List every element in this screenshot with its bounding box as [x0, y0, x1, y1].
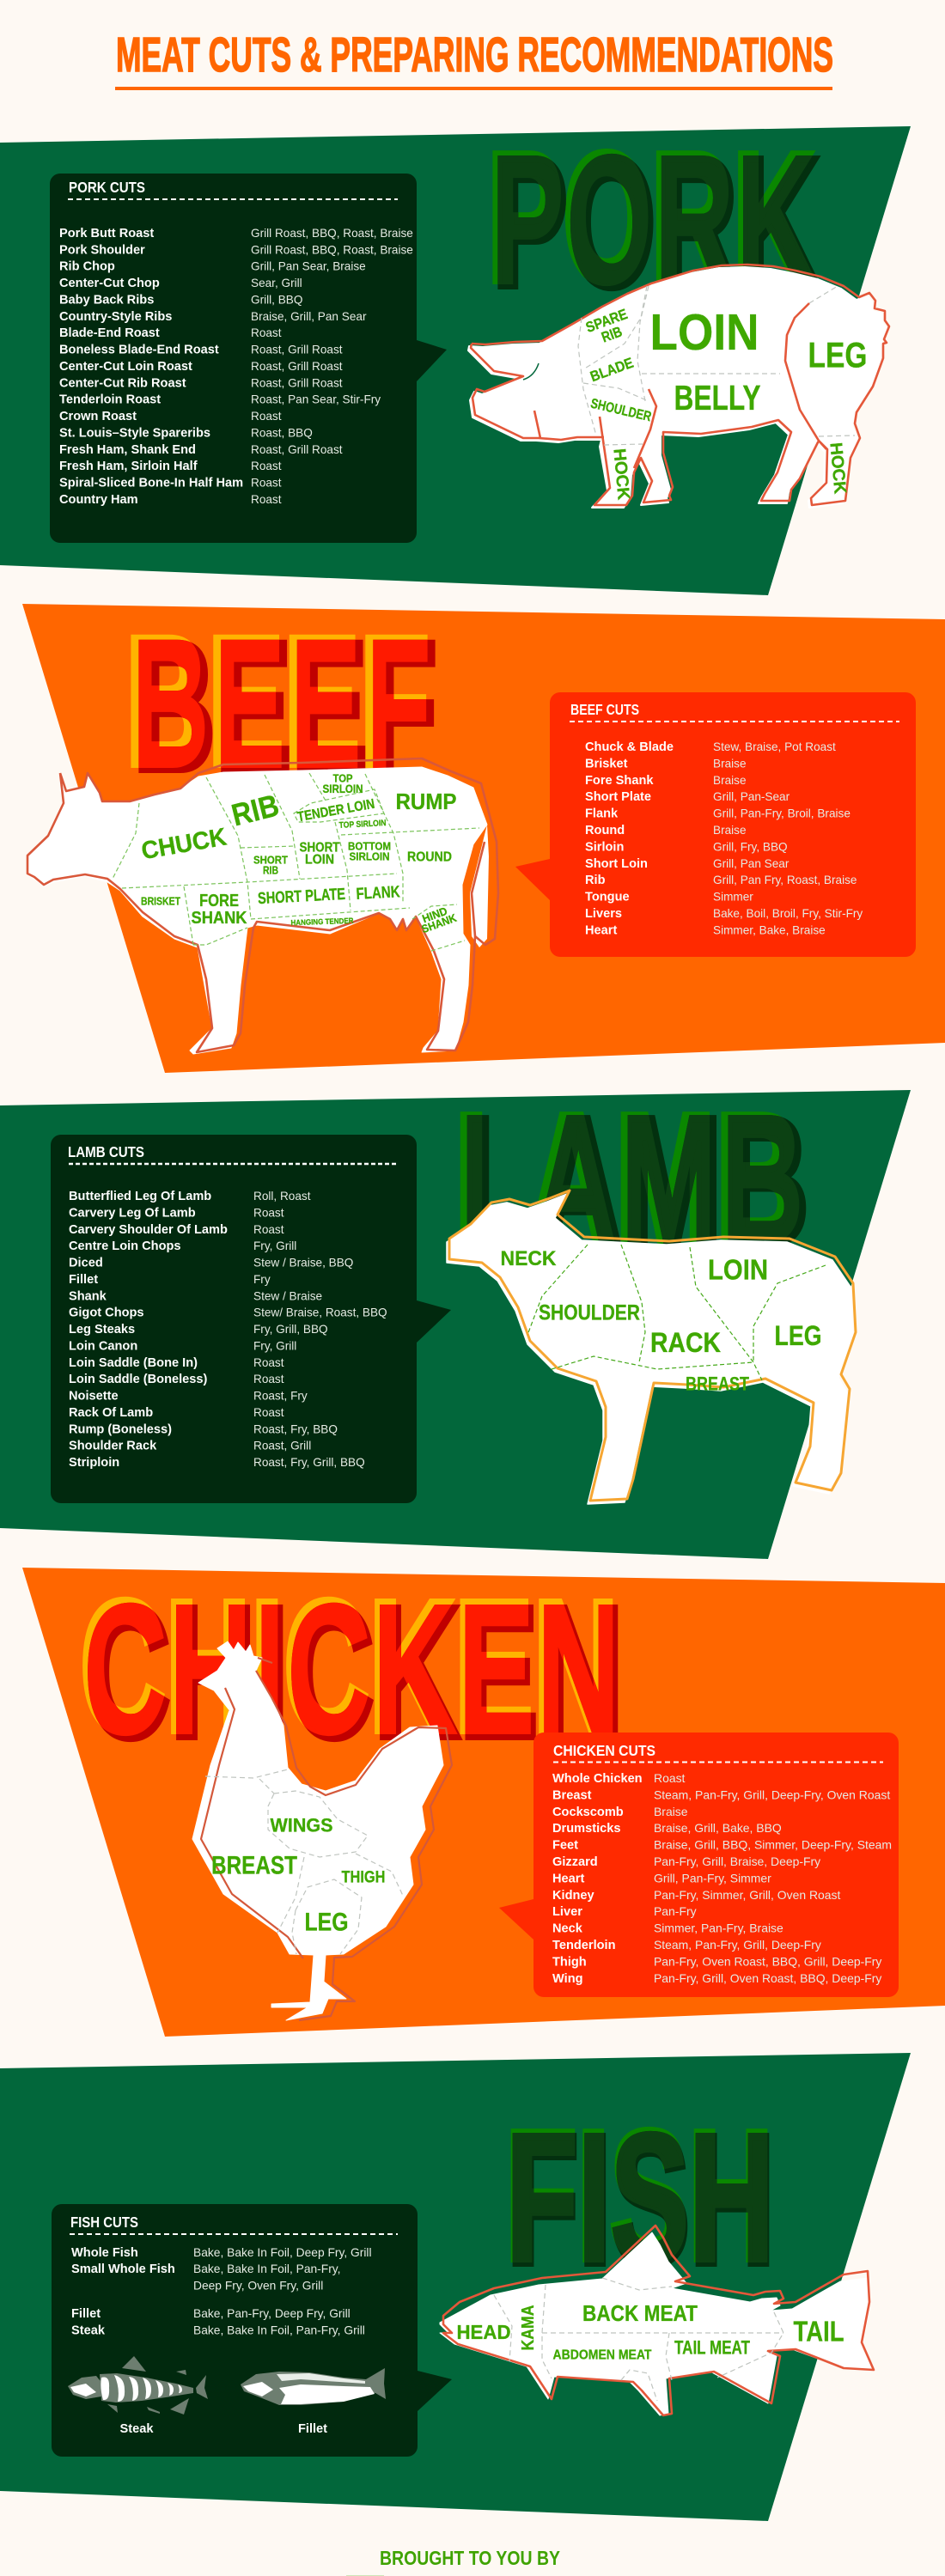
- panel: pork cuts table: Roast: [251, 477, 282, 490]
- panel: chicken cuts table: Grill, Pan-Fry, Simmer: [654, 1871, 771, 1885]
- pork cut labels: HOCK: [826, 442, 850, 495]
- panel: chicken cuts table: Steam, Pan-Fry, Grill, Deep-Fry: [654, 1938, 821, 1952]
- pork cut labels: SPARE: [583, 306, 630, 336]
- panel: fish cuts table: Deep Fry, Oven Fry, Grill: [193, 2280, 323, 2292]
- panel: pork cuts table: Roast, BBQ: [251, 426, 313, 439]
- beef cut labels: RIB: [263, 864, 278, 876]
- panel: lamb cuts table: Roll, Roast: [253, 1190, 311, 1203]
- beef cut labels: SIRLOIN: [323, 782, 363, 795]
- beef cut labels: HIND: [420, 904, 449, 925]
- pork cut labels: SHOULDER: [589, 397, 653, 424]
- pig diagram: [468, 265, 889, 508]
- panel: lamb cuts table: Fry, Grill: [253, 1339, 296, 1352]
- section: fish: [0, 2053, 911, 2521]
- beef cut labels: BRISKET: [141, 895, 180, 907]
- panel: lamb cuts table: Loin Saddle (Bone In): [69, 1356, 198, 1370]
- panel: lamb cuts table: Centre Loin Chops: [69, 1239, 181, 1253]
- panel: beef cuts table: Grill, Fry, BBQ: [713, 840, 788, 853]
- beef background band: [22, 604, 945, 1073]
- panel: lamb cuts table: Fry, Grill: [253, 1239, 296, 1252]
- panel: chicken cuts table: Tenderloin: [552, 1939, 616, 1952]
- panel: pork cuts table: Roast, Grill Roast: [251, 344, 343, 356]
- panel: pork cuts table: Tenderloin Roast: [59, 393, 161, 407]
- panel: lamb cuts table: Roast: [253, 1223, 284, 1236]
- panel: pork cuts table: Braise, Grill, Pan Sear: [251, 310, 367, 323]
- panel: lamb cuts table: Roast, Fry, Grill, BBQ: [253, 1456, 365, 1469]
- panel: pork cuts table: Grill Roast, BBQ, Roast, Braise: [251, 227, 413, 240]
- beef cut labels: SHANK: [420, 911, 459, 935]
- panel: pork cuts table: Grill, Pan Sear, Braise: [251, 260, 366, 273]
- pork cut labels: BLADE: [588, 355, 636, 385]
- panel: lamb cuts table: Roast, Fry: [253, 1390, 308, 1403]
- pork cut labels: [583, 304, 868, 501]
- panel: pork cuts table: Roast: [251, 493, 282, 506]
- panel: pork cuts table: [50, 174, 447, 543]
- beef cut labels: ROUND: [407, 850, 452, 864]
- panel: beef cuts table: Short Plate: [585, 790, 651, 804]
- panel: beef cuts table: Heart: [585, 923, 617, 937]
- panel: fish cuts table: Bake, Bake In Foil, Deep Fry, Grill: [193, 2246, 372, 2259]
- lamb heading: [460, 1111, 806, 1244]
- panel: beef cuts table: Brisket: [585, 757, 628, 770]
- pork cut labels: BELLY: [674, 378, 761, 417]
- panel: lamb cuts table: Rack Of Lamb: [69, 1406, 153, 1420]
- panel: lamb cuts table: Roast: [253, 1373, 284, 1385]
- fish heading: FISH: [507, 2096, 775, 2303]
- chicken heading: CHICKEN: [85, 1568, 624, 1777]
- panel: chicken cuts table: Braise: [654, 1805, 688, 1818]
- chicken cut labels: BREAST: [211, 1852, 297, 1879]
- panel: chicken cuts table: Cockscomb: [552, 1806, 624, 1819]
- panel: beef cuts table: Grill, Pan Fry, Roast, Braise: [713, 874, 857, 886]
- panel: fish cuts table: Bake, Bake In Foil, Pan-Fry,: [193, 2262, 341, 2275]
- panel: pork cuts table: Roast, Grill Roast: [251, 443, 343, 456]
- panel: lamb cuts table: Noisette: [69, 1390, 119, 1404]
- panel: beef cuts table: Flank: [585, 807, 619, 821]
- panel: pork cuts table: Pork Shoulder: [59, 243, 145, 257]
- panel: pork cuts table: Roast: [251, 326, 282, 339]
- beef cut labels: FORE: [199, 892, 239, 910]
- fish cut labels: TAIL: [794, 2316, 844, 2347]
- panel: fish cuts table: [52, 2204, 452, 2457]
- lamb cut labels: LEG: [775, 1320, 821, 1351]
- panel: fish cuts table: Bake, Pan-Fry, Deep Fry, Grill: [193, 2307, 351, 2320]
- panel: fish cuts table: Steak: [120, 2422, 154, 2436]
- panel: lamb cuts table: Roast: [253, 1356, 284, 1369]
- panel: chicken cuts table: Steam, Pan-Fry, Grill, Deep-Fry, Oven Roast: [654, 1787, 890, 1801]
- beef heading: [131, 634, 436, 773]
- panel: chicken cuts table: [499, 1733, 899, 1997]
- panel: beef cuts table: Fore Shank: [585, 774, 654, 788]
- panel: chicken cuts table: Liver: [552, 1905, 582, 1919]
- pork cut labels: LEG: [808, 335, 868, 375]
- beef cut labels: RIB: [228, 787, 283, 833]
- panel: beef cuts table: Chuck & Blade: [585, 740, 674, 754]
- chicken diagram: [192, 1641, 452, 2020]
- panel: chicken cuts table: Gizzard: [552, 1855, 598, 1869]
- panel: chicken cuts table: Pan-Fry, Oven Roast, BBQ, Grill, Deep-Fry: [654, 1954, 881, 1968]
- panel: beef cuts table: Tongue: [585, 891, 630, 904]
- panel: pork cuts table: Pork Butt Roast: [59, 227, 154, 241]
- panel: beef cuts table: Simmer: [713, 891, 753, 904]
- panel: beef cuts table: Braise: [713, 824, 747, 837]
- panel: lamb cuts table: Shank: [69, 1289, 107, 1303]
- chicken cut labels: WINGS: [270, 1814, 333, 1836]
- panel: lamb cuts table: Rump (Boneless): [69, 1422, 172, 1436]
- panel: lamb cuts table: Stew/ Braise, Roast, BBQ: [253, 1306, 387, 1319]
- panel: beef cuts table: Round: [585, 824, 625, 837]
- section: pork: [0, 113, 911, 595]
- fish cut labels: ABDOMEN MEAT: [553, 2348, 652, 2362]
- fish background band: [0, 2053, 911, 2521]
- panel: pork cuts table: Country-Style Ribs: [59, 310, 172, 324]
- panel: pork cuts table: Baby Back Ribs: [59, 294, 154, 308]
- section: beef: [22, 599, 945, 1073]
- panel: chicken cuts table: Wing: [552, 1972, 583, 1986]
- panel: lamb cuts table: Roast, Fry, BBQ: [253, 1422, 338, 1435]
- panel: chicken cuts table: Pan-Fry: [654, 1904, 697, 1918]
- beef cut labels: FLANK: [356, 883, 400, 904]
- panel: chicken cuts table: Neck: [552, 1922, 583, 1936]
- cow diagram: [27, 758, 498, 1054]
- lamb cut labels: BREAST: [686, 1373, 749, 1395]
- panel: lamb cuts table: Diced: [69, 1256, 103, 1270]
- panel: lamb cuts table: Fry: [253, 1273, 271, 1286]
- pork cut labels: RIB: [600, 323, 625, 346]
- panel: chicken cuts table: Pan-Fry, Simmer, Grill, Oven Roast: [654, 1888, 840, 1902]
- panel: lamb cuts table: Carvery Leg Of Lamb: [69, 1206, 196, 1220]
- beef heading: BEEF: [125, 599, 430, 804]
- panel: lamb cuts table: Carvery Shoulder Of Lamb: [69, 1223, 228, 1237]
- panel: chicken cuts table: Feet: [552, 1839, 578, 1853]
- section: chicken: [22, 1562, 945, 2037]
- panel: chicken cuts table: Thigh: [552, 1955, 587, 1969]
- lamb diagram: [447, 1191, 856, 1504]
- panel: fish cuts table: Whole Fish: [71, 2246, 138, 2260]
- panel: pork cuts table: Fresh Ham, Sirloin Half: [59, 460, 198, 473]
- panel: lamb cuts table: LAMB CUTS: [68, 1143, 144, 1160]
- panel: chicken cuts table: Heart: [552, 1872, 584, 1885]
- panel: chicken cuts table: Whole Chicken: [552, 1772, 643, 1786]
- lamb cut labels: NECK: [500, 1247, 557, 1270]
- beef cut labels: BOTTOM: [348, 840, 391, 852]
- pork heading: [492, 148, 821, 292]
- panel: pork cuts table: Roast: [251, 410, 282, 423]
- beef cut labels: [139, 771, 459, 935]
- beef cut labels: SIRLOIN: [349, 850, 390, 862]
- panel: chicken cuts table: Simmer, Pan-Fry, Braise: [654, 1921, 783, 1935]
- section: lamb: [0, 1075, 911, 1559]
- panel: pork cuts table: Grill Roast, BBQ, Roast, Braise: [251, 243, 413, 256]
- beef cut labels: RUMP: [395, 789, 457, 814]
- panel: beef cuts table: Grill, Pan Sear: [713, 857, 790, 870]
- panel: chicken cuts table: Drumsticks: [552, 1822, 620, 1836]
- chicken heading: CHICKEN: [80, 1562, 619, 1771]
- panel: pork cuts table: Center-Cut Loin Roast: [59, 360, 192, 374]
- footer credit: BROUGHT TO YOU BY: [380, 2547, 560, 2569]
- icon: fillet fish: [241, 2368, 386, 2405]
- fish cut labels: [457, 2300, 844, 2362]
- fish diagram: [440, 2226, 874, 2415]
- chicken heading: CHICKEN: [85, 1568, 624, 1777]
- panel: beef cuts table: Short Loin: [585, 857, 648, 871]
- chicken heading: [82, 1596, 619, 1742]
- panel: pork cuts table: Grill, BBQ: [251, 294, 302, 306]
- fish cut labels: HEAD: [457, 2321, 510, 2343]
- chicken cut labels: LEG: [304, 1909, 349, 1936]
- panel: fish cuts table: Bake, Bake In Foil, Pan-Fry, Grill: [193, 2324, 365, 2336]
- panel: chicken cuts table: Braise, Grill, BBQ, Simmer, Deep-Fry, Steam: [654, 1838, 892, 1852]
- beef cut labels: LOIN: [305, 852, 334, 868]
- panel: beef cuts table: Simmer, Bake, Braise: [713, 923, 826, 936]
- panel: chicken cuts table: Roast: [654, 1771, 686, 1785]
- panel: pork cuts table: PORK CUTS: [69, 179, 145, 196]
- panel: lamb cuts table: Roast: [253, 1406, 284, 1419]
- panel: chicken cuts table: Pan-Fry, Grill, Oven Roast, BBQ, Deep-Fry: [654, 1971, 881, 1985]
- panel: pork cuts table: Blade-End Roast: [59, 326, 160, 340]
- panel: beef cuts table: Livers: [585, 907, 622, 921]
- beef cut labels: CHUCK: [139, 824, 229, 865]
- panel: lamb cuts table: Butterflied Leg Of Lamb: [69, 1190, 211, 1203]
- beef cut labels: TOP SIRLOIN: [338, 819, 387, 831]
- pork background band: [0, 126, 911, 595]
- panel: lamb cuts table: Fillet: [69, 1273, 98, 1287]
- panel: fish cuts table: Fillet: [298, 2422, 327, 2436]
- panel: beef cuts table: Stew, Braise, Pot Roast: [713, 740, 836, 753]
- pork cut labels: HOCK: [609, 448, 633, 501]
- panel: beef cuts table: Grill, Pan-Fry, Broil, Braise: [713, 807, 850, 820]
- panel: fish cuts table: Steak: [71, 2324, 106, 2338]
- panel: pork cuts table: Rib Chop: [59, 260, 115, 274]
- panel: pork cuts table: Center-Cut Chop: [59, 277, 160, 290]
- panel: beef cuts table: Rib: [585, 874, 606, 887]
- panel: beef cuts table: Sirloin: [585, 840, 624, 854]
- panel: chicken cuts table: CHICKEN CUTS: [553, 1742, 655, 1759]
- panel: beef cuts table: Braise: [713, 774, 747, 787]
- chicken cut labels: [211, 1814, 385, 1936]
- panel: lamb cuts table: Roast, Grill: [253, 1440, 311, 1452]
- fish heading: FISH: [505, 2092, 773, 2299]
- panel: beef cuts table: BEEF CUTS: [570, 701, 639, 718]
- pork cut labels: LOIN: [649, 304, 759, 361]
- beef heading: BEEF: [133, 604, 437, 809]
- panel: pork cuts table: Center-Cut Rib Roast: [59, 376, 186, 390]
- beef cut labels: TENDER LOIN: [296, 797, 375, 825]
- icon: steak cut fish: [68, 2356, 208, 2415]
- chicken background band: [22, 1568, 945, 2037]
- panel: chicken cuts table: Braise, Grill, Bake, BBQ: [654, 1821, 782, 1835]
- panel: lamb cuts table: Leg Steaks: [69, 1323, 135, 1337]
- panel: beef cuts table: Braise: [713, 757, 747, 770]
- panel: fish cuts table: Small Whole Fish: [71, 2262, 175, 2276]
- panel: pork cuts table: Roast, Grill Roast: [251, 360, 343, 373]
- lamb cut labels: RACK: [650, 1327, 721, 1358]
- beef cut labels: SHORT: [253, 854, 288, 866]
- panel: pork cuts table: St. Louis–Style Spareribs: [59, 426, 210, 440]
- panel: lamb cuts table: Loin Saddle (Boneless): [69, 1373, 208, 1386]
- fish cut labels: TAIL MEAT: [674, 2336, 750, 2359]
- panel: lamb cuts table: Roast: [253, 1206, 284, 1219]
- panel: beef cuts table: [515, 692, 916, 957]
- panel: pork cuts table: Roast, Grill Roast: [251, 376, 343, 389]
- fish heading: [510, 2127, 770, 2267]
- chicken cut labels: THIGH: [342, 1869, 385, 1886]
- panel: pork cuts table: Fresh Ham, Shank End: [59, 443, 196, 457]
- panel: chicken cuts table: Breast: [552, 1788, 592, 1802]
- panel: lamb cuts table: [51, 1135, 451, 1503]
- panel: beef cuts table: Grill, Pan-Sear: [713, 790, 790, 803]
- fish cut labels: BACK MEAT: [582, 2300, 698, 2326]
- panel: lamb cuts table: Striploin: [69, 1456, 119, 1470]
- lamb background band: [0, 1090, 911, 1559]
- beef cut labels: SHORT: [299, 840, 340, 856]
- beef cut labels: SHANK: [191, 909, 247, 928]
- lamb cut labels: SHOULDER: [539, 1300, 640, 1325]
- panel: chicken cuts table: Pan-Fry, Grill, Braise, Deep-Fry: [654, 1854, 820, 1868]
- panel: pork cuts table: Spiral-Sliced Bone-In Half Ham: [59, 477, 243, 490]
- panel: lamb cuts table: Shoulder Rack: [69, 1440, 157, 1453]
- panel: chicken cuts table: Kidney: [552, 1889, 595, 1903]
- panel: pork cuts table: Roast, Pan Sear, Stir-Fry: [251, 393, 381, 406]
- beef heading: BEEF: [133, 604, 437, 809]
- lamb cut labels: LOIN: [708, 1254, 768, 1285]
- panel: fish cuts table: FISH CUTS: [70, 2214, 138, 2231]
- panel: lamb cuts table: Stew / Braise, BBQ: [253, 1256, 353, 1270]
- panel: pork cuts table: Roast: [251, 460, 282, 472]
- panel: lamb cuts table: Fry, Grill, BBQ: [253, 1323, 328, 1336]
- panel: lamb cuts table: Gigot Chops: [69, 1306, 144, 1320]
- lamb cut labels: [500, 1247, 821, 1395]
- beef cut labels: HANGING TENDER: [290, 917, 354, 927]
- fish heading: FISH: [507, 2096, 775, 2303]
- panel: lamb cuts table: Stew / Braise: [253, 1289, 322, 1302]
- panel: pork cuts table: Country Ham: [59, 493, 138, 507]
- panel: pork cuts table: Crown Roast: [59, 410, 137, 423]
- panel: pork cuts table: Sear, Grill: [251, 277, 302, 289]
- panel: pork cuts table: Boneless Blade-End Roast: [59, 344, 219, 357]
- panel: fish cuts table: Fillet: [71, 2307, 101, 2321]
- panel: beef cuts table: Bake, Boil, Broil, Fry, Stir-Fry: [713, 907, 863, 920]
- panel: lamb cuts table: Loin Canon: [69, 1339, 137, 1353]
- fish cut labels: KAMA: [519, 2305, 538, 2350]
- beef cut labels: SHORT PLATE: [258, 886, 346, 908]
- beef cut labels: TOP: [333, 771, 353, 785]
